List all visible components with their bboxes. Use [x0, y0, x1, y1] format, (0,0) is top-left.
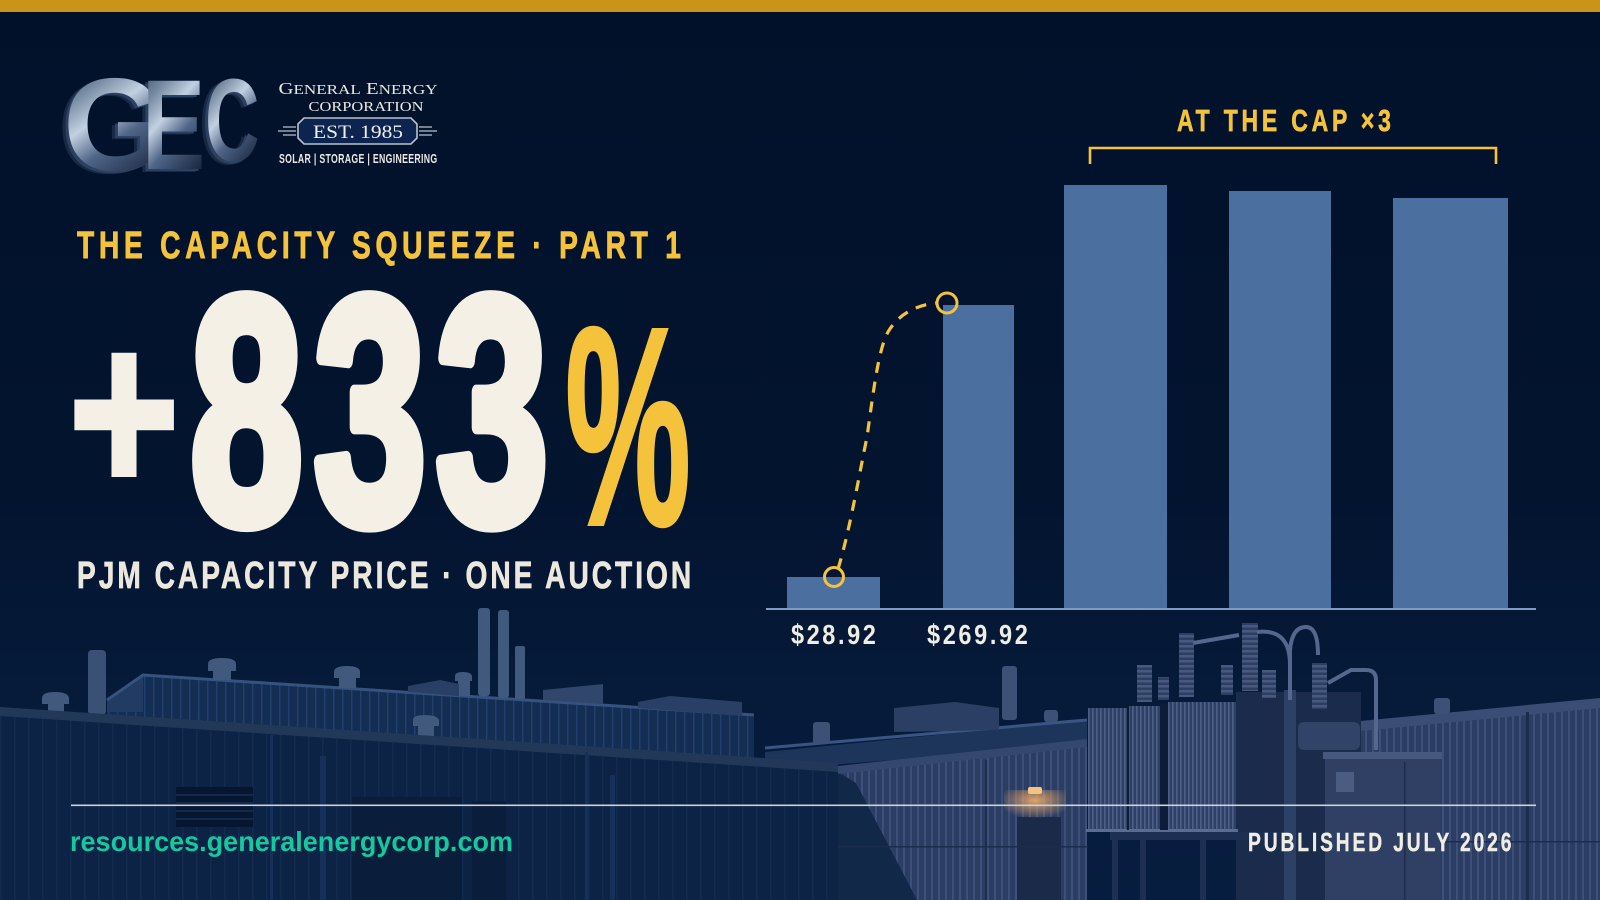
bar chart: [766, 103, 1536, 650]
big stat +833%: %: [565, 270, 691, 585]
logo mark GEC: C: [205, 54, 260, 186]
established badge: [278, 118, 437, 144]
lit wall: [838, 743, 1087, 900]
bar: $28.92: [787, 577, 880, 608]
big stat +833%: 3: [314, 231, 426, 591]
logo mark GEC: G: [63, 51, 166, 198]
main wall: [0, 712, 838, 900]
roof fascia: [0, 707, 838, 772]
rooftop air handlers: [408, 680, 742, 716]
big stat +833%: [68, 231, 691, 591]
established badge: EST. 1985: [313, 123, 403, 143]
rooftop penthouse: [107, 675, 754, 760]
control cabinet: [1323, 752, 1442, 900]
roof edge: [838, 739, 1087, 774]
air handling unit: [894, 702, 999, 732]
cap bracket: [1090, 148, 1496, 164]
radiators: [1086, 702, 1238, 832]
eyebrow heading: THE CAPACITY SQUEEZE · PART 1: [77, 225, 681, 267]
wall bands: [838, 712, 1600, 900]
conductors: [1193, 627, 1376, 750]
bar: $269.92: [943, 305, 1014, 608]
big stat +833%: 3: [436, 231, 548, 591]
dashed growth arrow: [824, 293, 957, 586]
bar: at cap 3: [1393, 198, 1508, 608]
door lamp glow: [1004, 790, 1066, 820]
tagline: SOLAR | STORAGE | ENGINEERING: [279, 153, 437, 166]
stat caption: PJM CAPACITY PRICE · ONE AUCTION: [77, 555, 691, 597]
dark doors: [352, 797, 506, 900]
rooftop stacks: [88, 608, 525, 715]
baseline: [766, 608, 1536, 610]
rooftop vents: [42, 658, 472, 737]
far right roof: [1350, 698, 1600, 732]
company name second line: CORPORATION: [308, 100, 424, 115]
label $269.92: $269.92: [927, 620, 1028, 650]
logo mark GEC: [63, 51, 260, 198]
conservator tank: [1298, 722, 1360, 750]
logo mark GEC: E: [142, 53, 205, 196]
exhaust stack: [1002, 666, 1017, 720]
cap label: AT THE CAP ×3: [1177, 103, 1391, 138]
bushings: [1137, 623, 1327, 709]
publication date: PUBLISHED JULY 2026: [1248, 827, 1511, 857]
top accent bar: [0, 0, 1600, 12]
wall louver: [176, 787, 253, 827]
industrial scene: left building: [0, 608, 838, 900]
transformer: [1086, 623, 1442, 900]
bar: at cap 2: [1229, 191, 1331, 608]
mid penthouse: [765, 720, 1087, 770]
logo: [63, 51, 438, 198]
label $28.92: $28.92: [791, 620, 876, 650]
company name: GENERAL ENERGY: [278, 79, 438, 98]
footer rule: [71, 804, 1536, 806]
industrial scene: mid and right buildings: [765, 666, 1600, 900]
door: [1017, 817, 1061, 900]
big stat +833%: 8: [190, 231, 303, 591]
big stat +833%: +: [68, 281, 180, 544]
transformer body: [1236, 692, 1361, 900]
bar: at cap 1: [1064, 185, 1167, 608]
downpipes: [270, 735, 615, 900]
website URL: resources.generalenergycorp.com: [70, 826, 513, 857]
roof vent: [1434, 698, 1450, 714]
far right wall: [1350, 703, 1600, 900]
lit wall shadow: [838, 772, 917, 900]
lower frame and pipes: [1110, 690, 1296, 900]
mid penthouse roof edge: [765, 720, 1087, 748]
door lamp: [1028, 787, 1042, 794]
vents: [813, 710, 1058, 744]
